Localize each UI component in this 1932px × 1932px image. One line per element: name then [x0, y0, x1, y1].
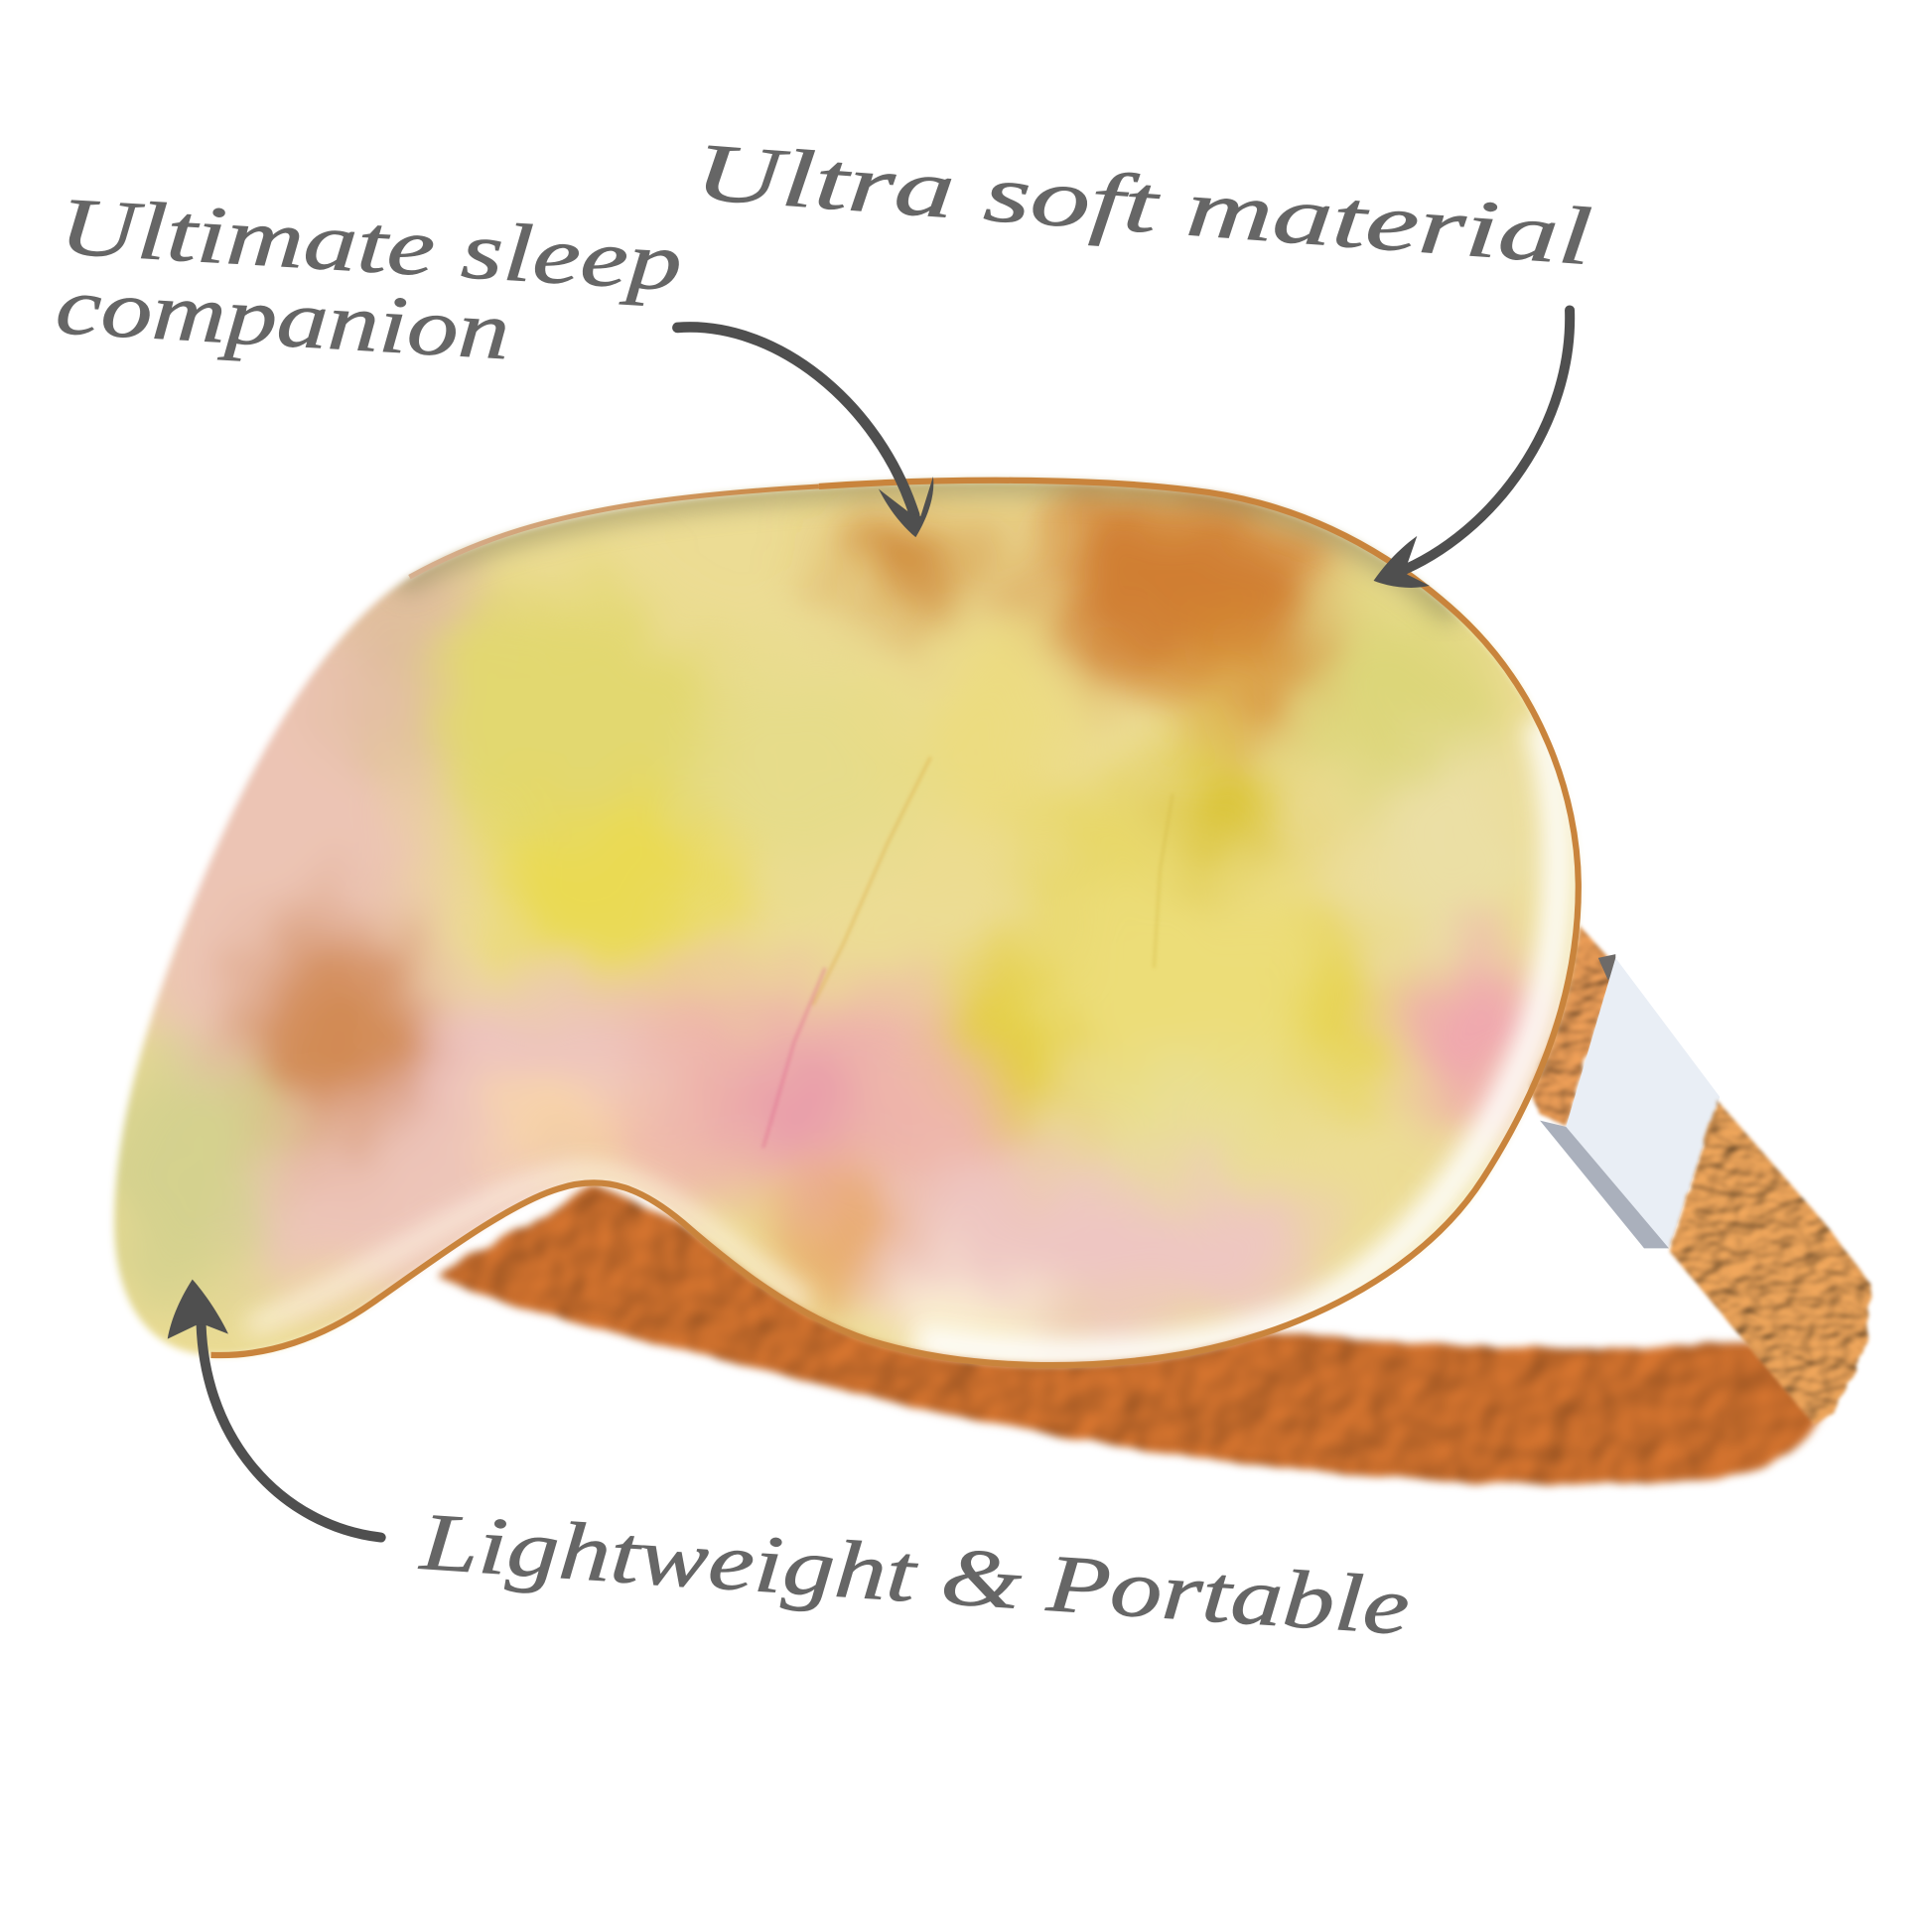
arrow: to bottom left of mask [168, 1280, 381, 1538]
sleep mask body [109, 475, 1583, 1371]
mask piping rim [210, 481, 1579, 1365]
arrow: to top right of mask [1374, 310, 1570, 588]
elastic white band [1540, 954, 1720, 1248]
mask rim fading on the left shoulder [409, 486, 819, 577]
back strap [437, 1185, 1824, 1484]
label: Ultra soft material: Ultra soft material [692, 126, 1594, 282]
label: Ultimate sleep companion [54, 181, 684, 376]
mask fabric tie-dye pattern [109, 475, 1583, 1371]
label: Ultimate sleep companion: Ultimate sleep [58, 181, 684, 308]
mask edge shading [397, 481, 1458, 615]
fabric veins [763, 757, 1173, 1148]
front strap: long textured piece [1669, 1101, 1871, 1425]
arrow: to top of mask [677, 327, 933, 537]
front strap: short piece near mask [1526, 924, 1615, 1127]
label: Ultimate sleep companion: companion [54, 260, 512, 376]
label: Lightweight & Portable: Lightweight & Portable [417, 1496, 1412, 1652]
